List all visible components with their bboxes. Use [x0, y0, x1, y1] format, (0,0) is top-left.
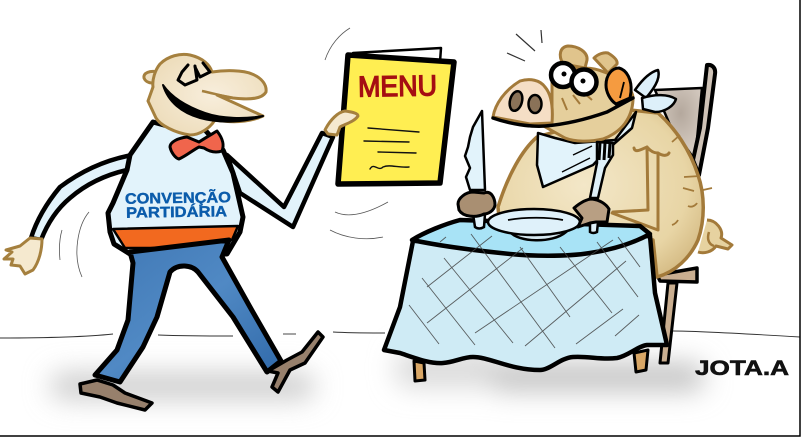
mask tie	[635, 70, 676, 112]
plate	[488, 209, 580, 240]
menu back page	[353, 48, 441, 62]
waiter mouth	[163, 85, 263, 122]
pig eyes	[551, 63, 596, 94]
menu text lines	[364, 128, 419, 169]
pig snout	[493, 80, 552, 124]
mask strap	[493, 98, 633, 126]
right pig hand	[574, 199, 609, 227]
floor line	[0, 331, 800, 338]
pig orange ear	[606, 68, 631, 104]
left pig hand	[458, 192, 495, 216]
waiter left arm	[31, 155, 132, 240]
pig tail	[698, 220, 732, 253]
napkin	[537, 112, 636, 187]
pig bristles	[672, 135, 712, 225]
chair seat	[657, 268, 697, 282]
waiter trousers	[95, 240, 281, 382]
motion lines	[59, 28, 388, 277]
waiter	[4, 54, 333, 410]
surprise marks	[507, 30, 542, 61]
chair post	[693, 65, 715, 175]
table	[384, 220, 667, 381]
waiter face	[148, 54, 266, 135]
pig arm	[612, 147, 669, 230]
pig face wrinkles	[562, 92, 592, 110]
waiter closed eyes	[178, 63, 210, 85]
pig nostrils	[508, 90, 542, 113]
signature: JOTA.A	[695, 357, 789, 380]
knife	[465, 111, 485, 228]
menu title: MENU	[358, 70, 437, 104]
table legs	[414, 350, 648, 381]
menu	[338, 48, 454, 184]
cloth pattern	[409, 234, 640, 348]
floor shadows	[50, 350, 705, 400]
chair back panel	[655, 88, 702, 160]
waiter right shoe	[268, 332, 323, 392]
pig body	[498, 110, 703, 277]
waiter left hand	[4, 238, 42, 274]
menu cover	[338, 55, 454, 184]
waiter right arm	[227, 133, 333, 227]
tablecloth drape	[384, 236, 667, 370]
chair	[655, 65, 715, 363]
waiter right hand	[325, 111, 358, 135]
bow tie	[170, 131, 223, 159]
waiter torso	[108, 122, 243, 254]
fork	[590, 142, 613, 233]
pig head	[540, 68, 633, 141]
waiter head	[144, 54, 266, 135]
shirt text: CONVENÇÃO	[125, 188, 231, 208]
waiter sash	[113, 226, 238, 248]
table top	[412, 220, 650, 256]
shirt text	[125, 188, 232, 222]
pig	[493, 30, 732, 277]
pig top ears	[560, 46, 617, 73]
shirt text: PARTIDÁRIA	[126, 203, 227, 222]
waiter left shoe	[80, 380, 152, 410]
chair leg	[660, 283, 677, 363]
waiter ear	[144, 71, 158, 83]
